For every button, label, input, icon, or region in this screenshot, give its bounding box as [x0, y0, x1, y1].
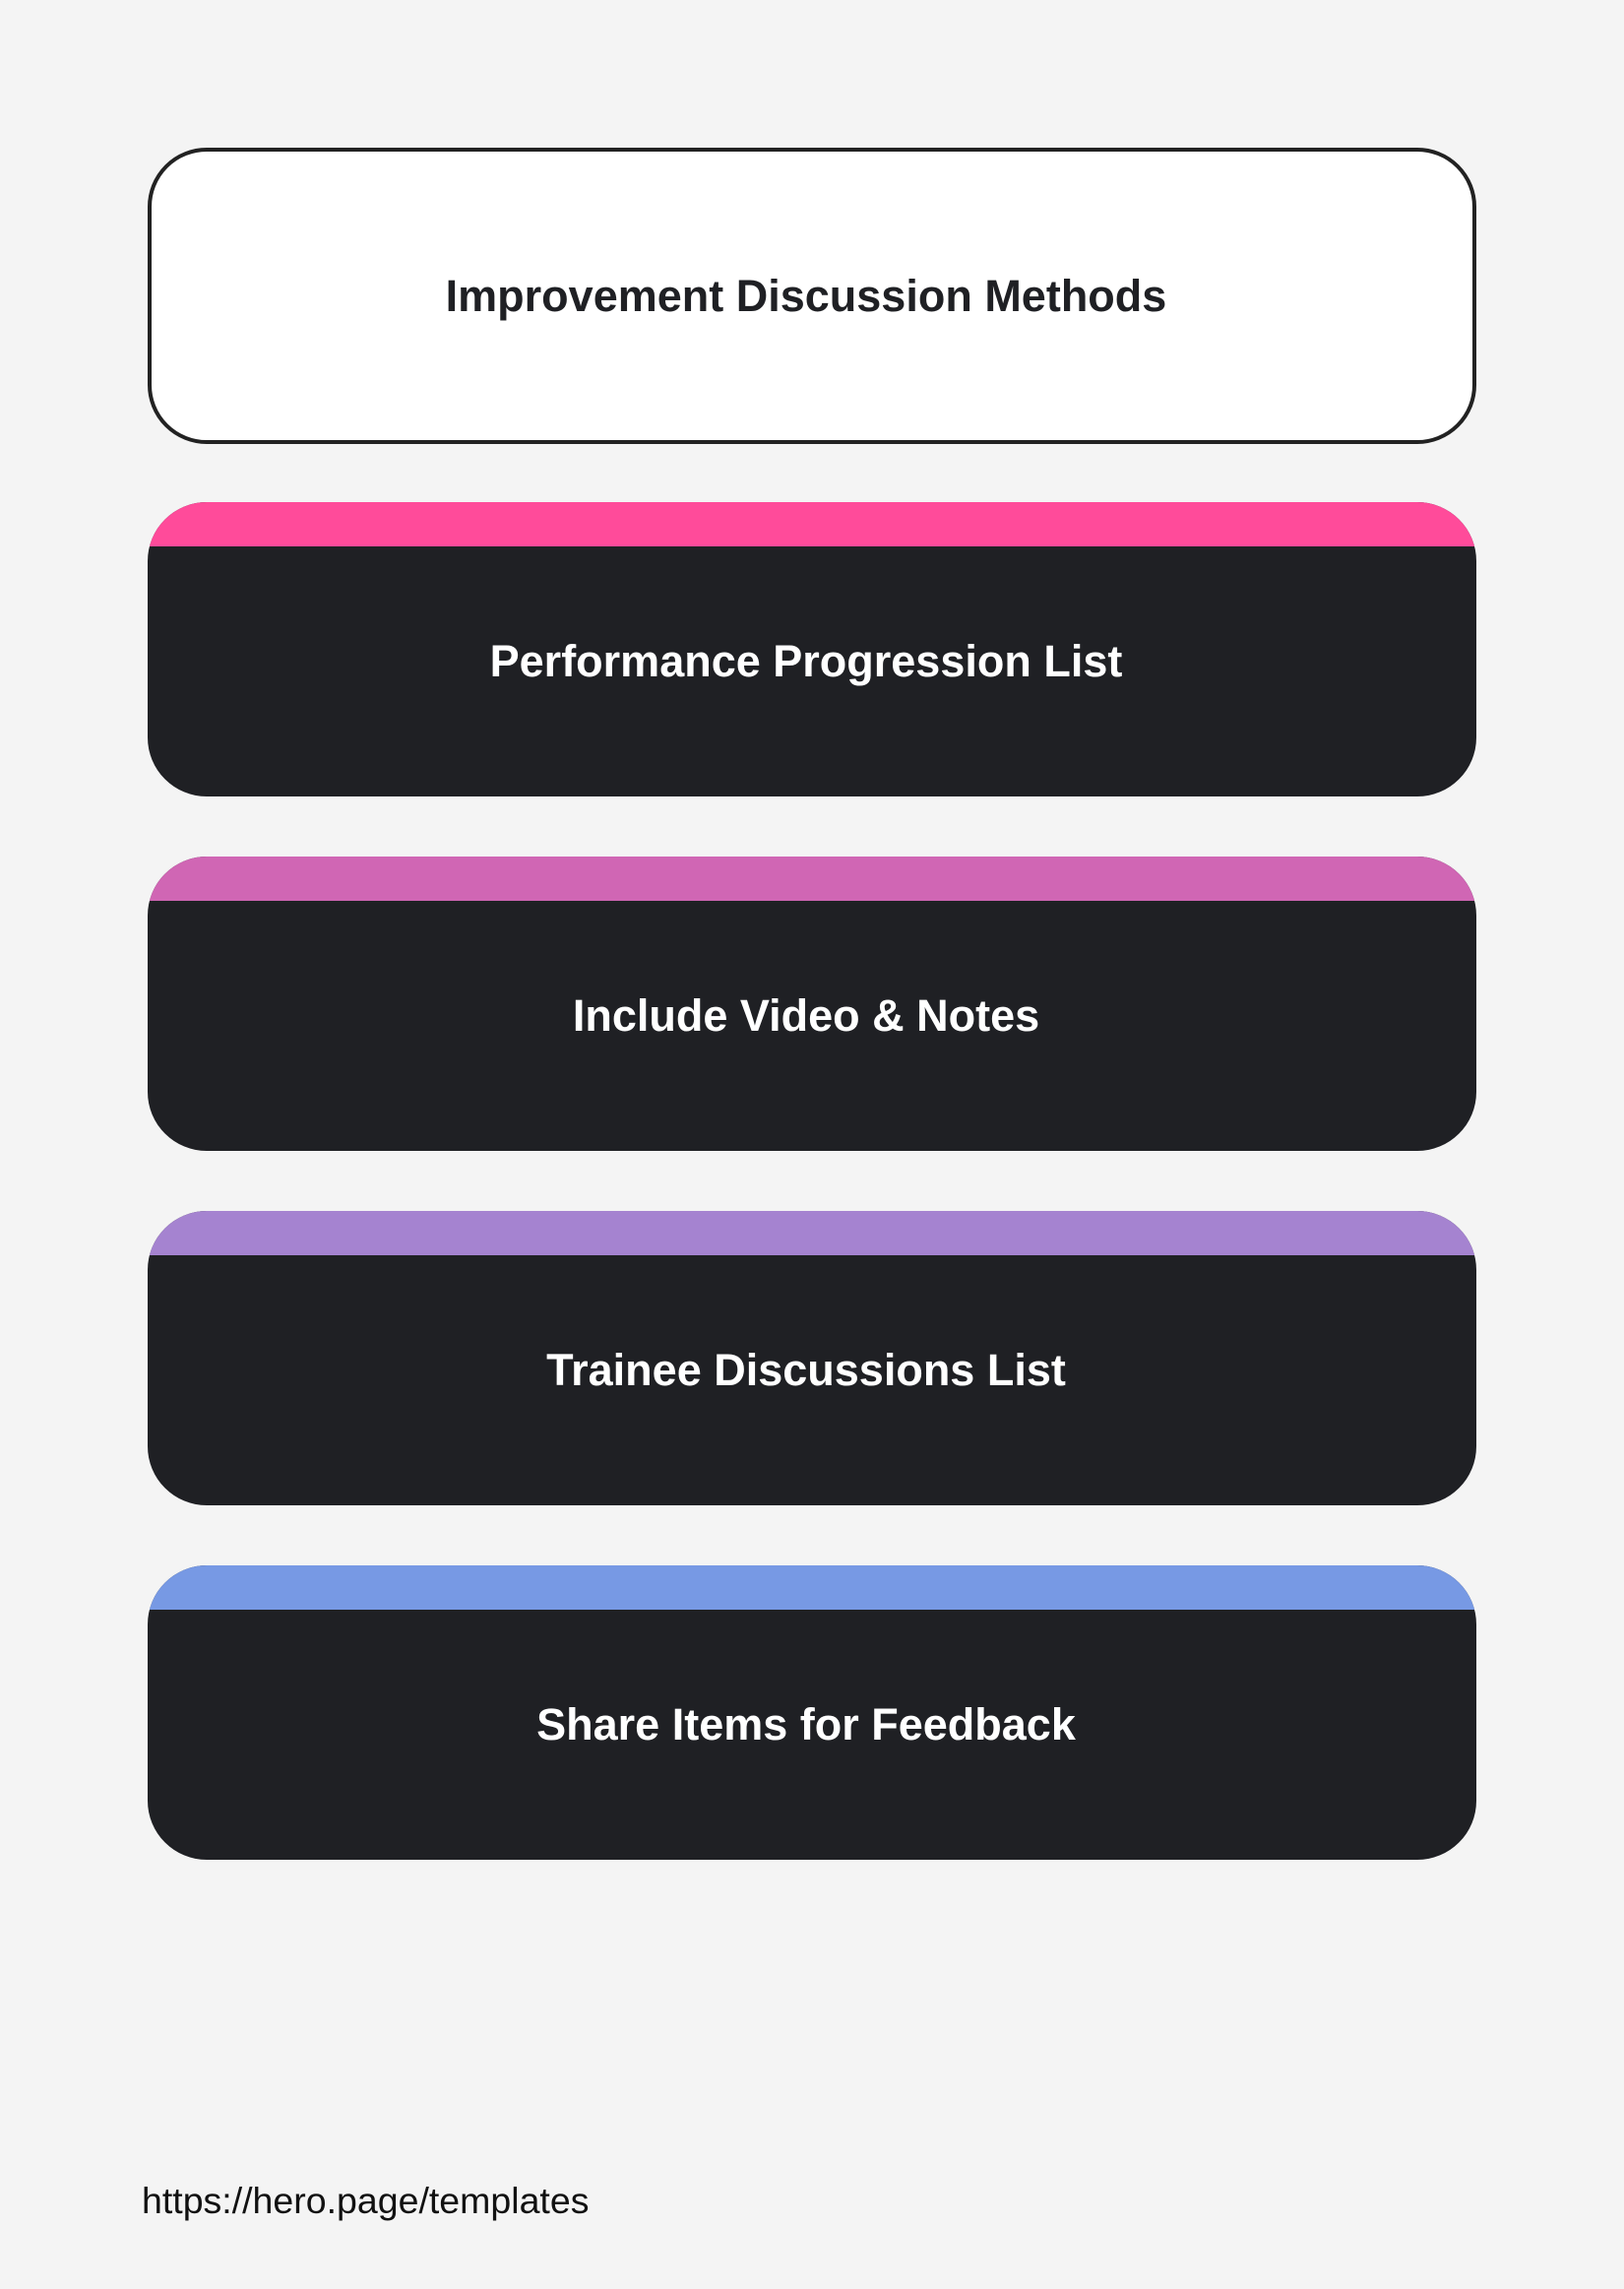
- card: performance progression list: [148, 502, 1476, 796]
- title: Improvement Discussion Methods: [446, 270, 1166, 321]
- card: trainee discussions list: [148, 1211, 1476, 1505]
- footer url: https://hero.page/templates: [142, 2180, 589, 2221]
- card: performance progression list: Performance Progression List: [490, 636, 1122, 685]
- card: include video & notes: Include Video & Notes: [573, 990, 1039, 1040]
- card: share items for feedback: [148, 1565, 1476, 1860]
- card: include video & notes: [148, 857, 1476, 1151]
- title: [148, 148, 1476, 444]
- card: share items for feedback: Share Items for Feedback: [536, 1699, 1076, 1749]
- card: trainee discussions list: Trainee Discussions List: [546, 1345, 1066, 1394]
